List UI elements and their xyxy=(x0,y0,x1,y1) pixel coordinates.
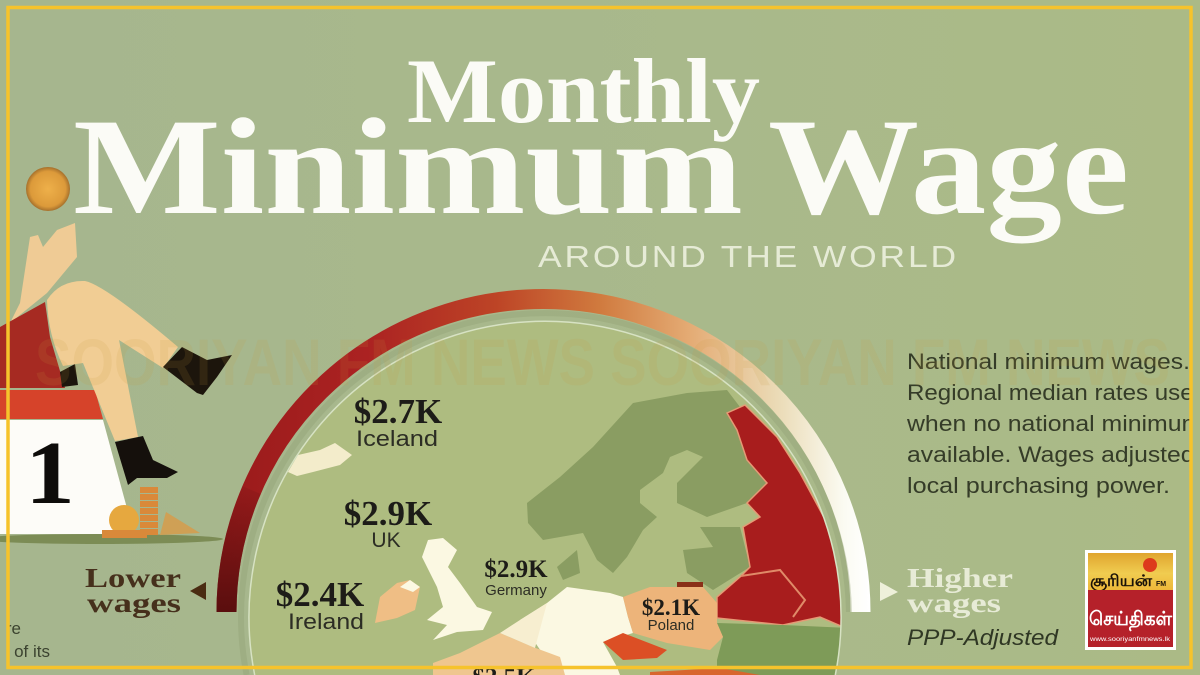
arm and hand xyxy=(10,223,77,323)
Poland name: Poland xyxy=(648,617,694,634)
large coin xyxy=(109,505,139,535)
map of Europe xyxy=(249,321,850,675)
map country names xyxy=(288,426,694,634)
map value labels xyxy=(276,392,700,675)
UK value: $2.9K xyxy=(344,494,432,533)
logo top panel xyxy=(1088,553,1173,590)
arrow left xyxy=(190,582,206,600)
logo FM: FM xyxy=(1156,581,1166,588)
Ireland name: Ireland xyxy=(288,609,364,634)
Ukraine xyxy=(717,623,850,675)
legend: lower wages xyxy=(85,563,206,618)
Benelux xyxy=(500,603,547,648)
legs xyxy=(47,281,178,441)
arc band xyxy=(226,299,861,612)
methodology note xyxy=(906,349,1200,498)
higher label: Higher xyxy=(907,563,1013,593)
Northern Ireland xyxy=(400,580,420,592)
dress xyxy=(0,302,65,388)
flat coins xyxy=(102,530,147,538)
note line 3: when no national minimum is xyxy=(906,411,1200,436)
note line 1: National minimum wages. xyxy=(907,349,1190,374)
title line: Monthly: Monthly xyxy=(407,40,760,142)
Russia and Belarus xyxy=(717,405,850,630)
calendar page xyxy=(0,420,134,534)
Ireland value: $2.4K xyxy=(276,575,364,614)
France xyxy=(433,633,565,675)
Poland value: $2.1K xyxy=(642,595,700,620)
Denmark xyxy=(557,550,580,580)
logo news word: செய்திகள் xyxy=(1089,609,1173,632)
boot: resting xyxy=(115,436,178,485)
Germany name: Germany xyxy=(485,582,547,599)
arc dark end xyxy=(226,490,252,612)
subtitle: AROUND THE WORLD xyxy=(538,239,959,274)
boot: raised xyxy=(163,347,232,395)
coins pile xyxy=(102,487,200,538)
wages label: wages xyxy=(907,588,1001,618)
logo: Sooriyan FM news xyxy=(1085,550,1176,650)
Iceland name: Iceland xyxy=(356,426,438,451)
title word: Minimum: Minimum xyxy=(73,90,743,243)
wage gradient arc xyxy=(226,299,861,675)
calendar xyxy=(0,390,134,534)
note line 4: available. Wages adjusted to xyxy=(907,442,1200,467)
Baltic states xyxy=(683,527,750,590)
wages label: wages xyxy=(87,588,181,618)
calendar number: 1 xyxy=(25,424,75,523)
note line 2: Regional median rates used xyxy=(907,380,1200,405)
logo bottom panel xyxy=(1088,590,1173,647)
UK xyxy=(422,538,492,640)
Iceland value: $2.7K xyxy=(354,392,442,431)
logo border xyxy=(1085,550,1176,650)
Kaliningrad xyxy=(677,582,703,587)
logo url: www.sooriyanfmnews.lk xyxy=(1089,636,1171,643)
logo brand name: சூரியன் xyxy=(1090,573,1153,591)
Scandinavia and Finland xyxy=(527,390,767,573)
legend: higher wages xyxy=(880,563,1059,650)
illustration: woman on calendar xyxy=(0,167,232,544)
Ireland xyxy=(375,580,420,623)
Austria and Hungary edge xyxy=(650,669,760,675)
UK name: UK xyxy=(371,529,401,552)
arrow right xyxy=(880,582,898,601)
note line 2: of its xyxy=(14,642,50,661)
garter strap xyxy=(60,364,78,387)
Germany xyxy=(520,587,633,675)
logo sun xyxy=(1143,558,1157,572)
note line 5: local purchasing power. xyxy=(907,473,1170,498)
Poland xyxy=(623,587,723,650)
title xyxy=(73,40,1129,243)
ground xyxy=(0,534,223,544)
Czechia xyxy=(603,633,667,660)
lower label: Lower xyxy=(85,563,181,593)
Germany value: $2.9K xyxy=(484,556,548,583)
leaning coins xyxy=(160,512,200,535)
arc inner shading xyxy=(241,313,849,675)
Belarus border xyxy=(741,570,805,617)
title word: Wage: Wage xyxy=(768,90,1129,243)
clipped left note xyxy=(10,625,50,657)
map sea xyxy=(249,321,841,675)
coin stack xyxy=(140,487,158,535)
Iceland xyxy=(288,443,352,476)
icon: coin xyxy=(26,167,70,211)
PPP adjusted label: PPP-Adjusted xyxy=(907,625,1059,650)
calendar header xyxy=(0,390,103,419)
map edge xyxy=(249,321,841,675)
